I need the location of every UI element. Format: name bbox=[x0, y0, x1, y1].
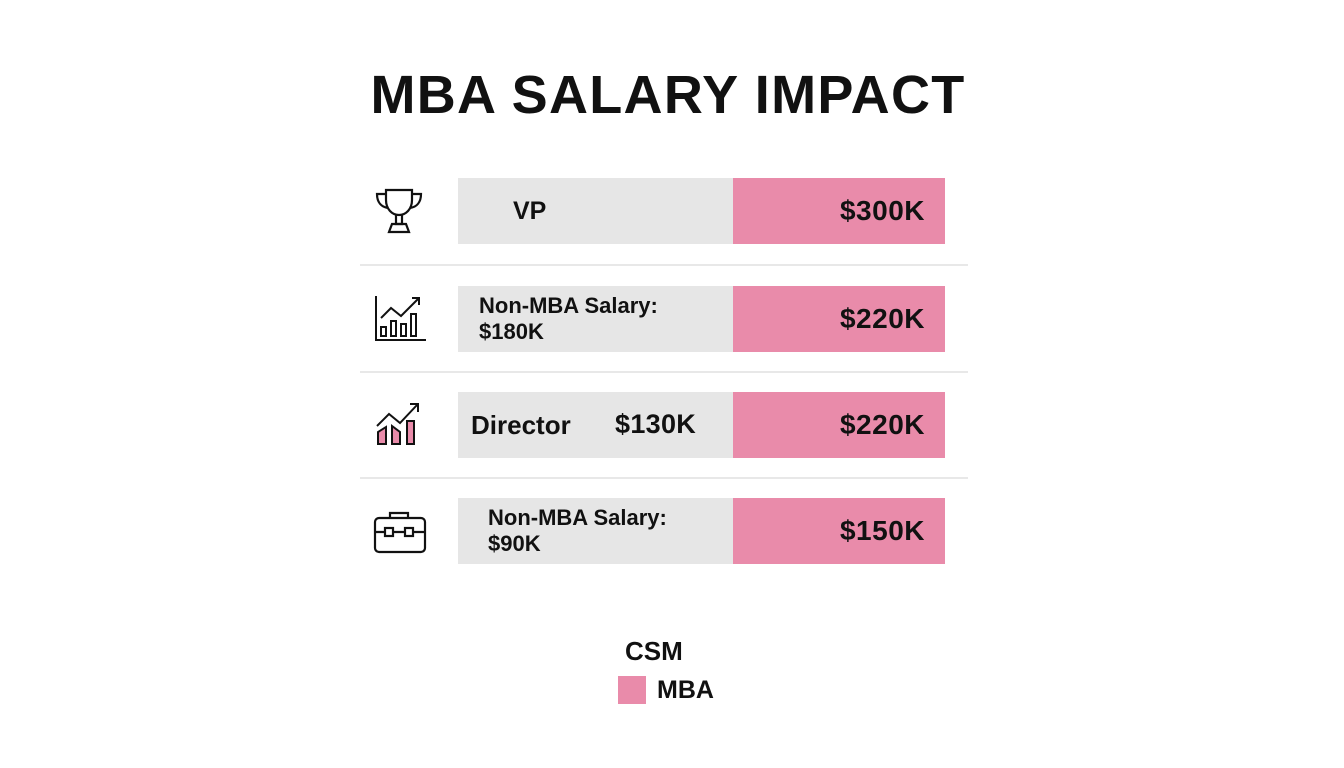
bar: VP MBA bbox=[733, 178, 945, 244]
label: $90K bbox=[488, 531, 541, 556]
non-MBA value: $130K bbox=[615, 409, 696, 439]
legend swatch: MBA bbox=[618, 676, 646, 704]
label: Non-MBA Salary: bbox=[488, 505, 667, 530]
bar: MBA 150K: $150K bbox=[840, 515, 925, 546]
label bbox=[488, 505, 667, 556]
bar: MBA 220K: $220K bbox=[840, 409, 925, 440]
legend: MBA bbox=[657, 676, 714, 704]
label: VP bbox=[513, 197, 546, 225]
label: $180K bbox=[479, 319, 544, 344]
label bbox=[479, 293, 658, 344]
icon: pink bar chart bbox=[376, 403, 419, 445]
row: Director bbox=[376, 392, 945, 458]
row: Non-MBA 90K bbox=[374, 498, 945, 564]
icon: briefcase bbox=[374, 512, 426, 554]
bar: MBA 220K bbox=[733, 392, 945, 458]
row: Non-MBA 180K bbox=[375, 286, 945, 352]
bar: MBA 220K: $220K bbox=[840, 303, 925, 334]
title: MBA SALARY IMPACT bbox=[370, 65, 966, 125]
legend: CSM: CSM bbox=[625, 636, 683, 666]
row: VP bbox=[376, 178, 945, 244]
bar: VP MBA: $300K bbox=[840, 195, 925, 226]
label: Non-MBA Salary: bbox=[479, 293, 658, 318]
label: Director bbox=[471, 410, 571, 440]
bar: MBA 150K bbox=[733, 498, 945, 564]
icon: trophy bbox=[376, 188, 422, 234]
legend bbox=[618, 636, 714, 704]
icon: bar chart outline bbox=[375, 296, 426, 341]
bar: MBA 220K bbox=[733, 286, 945, 352]
